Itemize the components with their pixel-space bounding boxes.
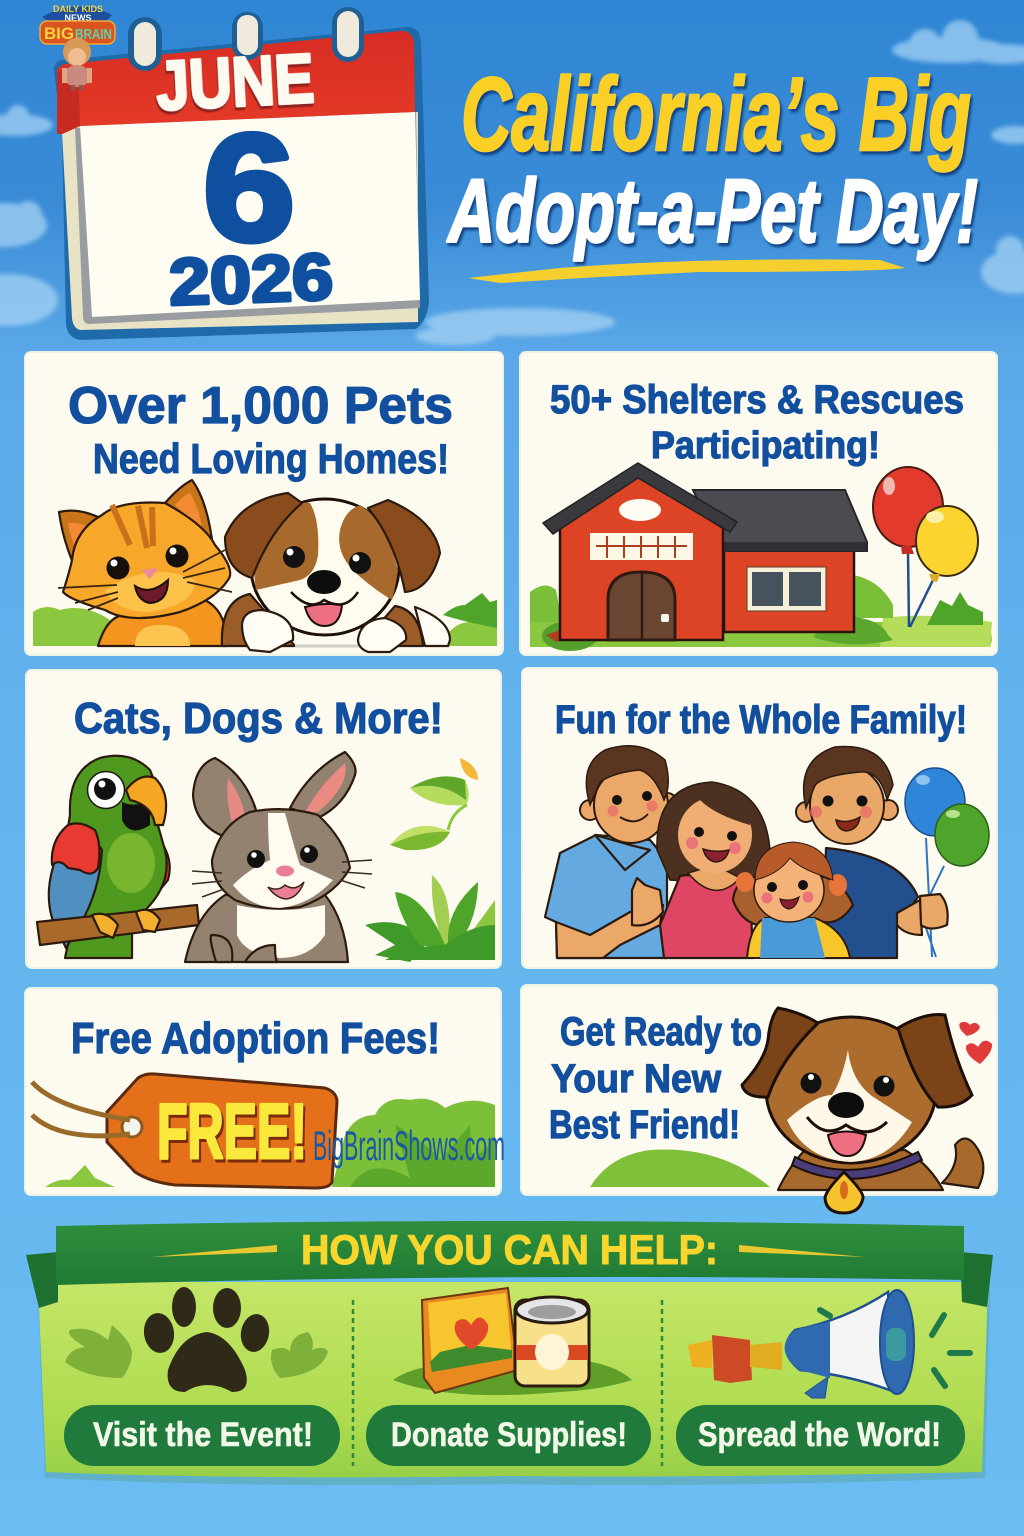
dividers [353,1300,662,1466]
calendar month: JUNE [154,39,316,125]
bushes [45,1099,495,1187]
heading: 50+ Shelters & Rescues [550,378,964,422]
free label: FREE! [157,1087,307,1175]
calendar rings [128,7,364,71]
grass tuft [443,593,497,628]
icon: shelter building [543,463,867,640]
icon: man on right [796,746,922,958]
subheading: Participating! [651,425,880,467]
icon: mom [657,782,770,958]
ribbon tails [26,1252,993,1308]
calendar day: 6 [203,103,295,273]
logo: Daily Kids News Big Brain [40,4,115,91]
icon: food bag and can [393,1288,632,1395]
icon: megaphone [688,1290,970,1398]
logo: Daily Kids News Big Brain: NEWS [64,13,92,23]
pill: spread [676,1405,965,1466]
heading: Get Ready to [560,1010,762,1054]
calendar year: 2026 [168,239,334,319]
heading: Over 1,000 Pets [68,377,453,435]
heading: Free Adoption Fees! [71,1014,440,1063]
grass mound [590,1149,770,1187]
pill: donate [366,1405,651,1466]
clouds [0,20,1024,345]
grass [530,575,992,651]
card: free adoption fees [25,988,505,1195]
icon: rabbit [185,752,372,962]
pill: visit: Visit the Event! [93,1416,313,1454]
card: get ready [521,985,997,1213]
icon: balloons [873,467,978,627]
heading [549,1010,762,1147]
heading: Cats, Dogs & More! [74,694,443,743]
watermark: BigBrainShows.com [313,1122,505,1169]
icon: girl [733,842,853,958]
icon: left leaf [65,1325,132,1378]
icon: dad [545,746,677,958]
icon: family balloons [905,768,989,957]
banner heading: HOW YOU CAN HELP: [301,1226,718,1273]
logo: Daily Kids News Big Brain: BRAIN [75,26,112,43]
heading: Best Friend! [549,1103,740,1147]
card: over 1,000 pets [25,352,503,655]
pill: donate: Donate Supplies! [391,1416,627,1454]
heading: Your New [551,1057,722,1101]
icon: cat [58,480,232,646]
logo: Daily Kids News Big Brain: BIG [44,24,74,43]
banner [56,1221,964,1285]
icon: free tag [32,1074,337,1188]
banner flourishes [152,1245,864,1257]
icon: dog [742,1008,992,1213]
icon: right leaf [271,1332,328,1378]
title [447,57,978,283]
card: fun for the whole family [522,668,997,968]
pill: visit [64,1405,340,1466]
icon: plant [365,758,495,962]
icon: paw [141,1287,272,1392]
card: 50+ shelters [520,352,997,655]
card: cats, dogs and more [26,670,501,968]
pill: spread: Spread the Word! [698,1416,941,1454]
grass [33,607,497,646]
icon: parrot [37,756,199,958]
logo: Daily Kids News Big Brain: DAILY KIDS [53,4,103,14]
subheading: Need Loving Homes! [93,435,449,482]
title underline swoosh [468,259,905,283]
panel: how you can help [26,1221,993,1485]
icon: puppy [222,493,450,652]
calendar [54,7,429,340]
